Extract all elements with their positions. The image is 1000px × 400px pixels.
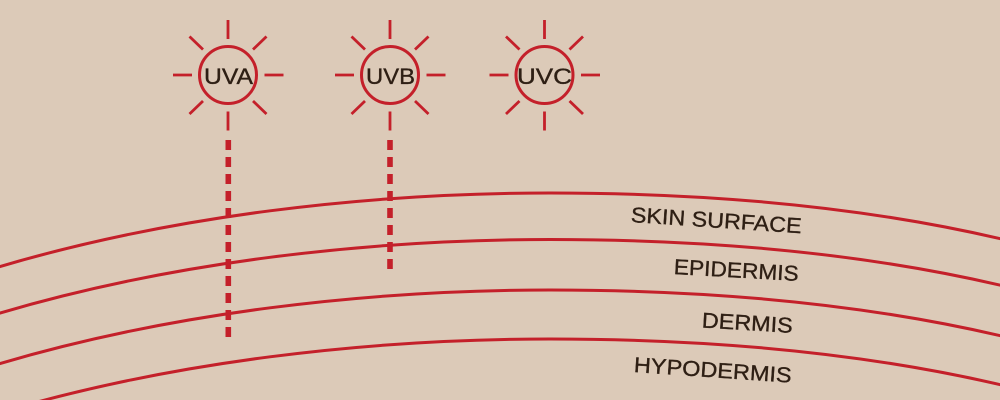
label: UVC: UVC [517, 64, 572, 89]
icon: UVB sun [335, 20, 446, 130]
label: epidermis: EPIDERMIS [673, 255, 799, 286]
arrow: UVA penetration dashed line [226, 140, 231, 338]
label: UVB: UVB [366, 64, 415, 89]
label: dermis: DERMIS [701, 309, 793, 338]
curve: epidermis [0, 240, 1000, 316]
icon: UVA sun [173, 20, 284, 130]
label: UVA: UVA [204, 64, 253, 89]
label: skin surface: SKIN SURFACE [630, 203, 802, 238]
label: hypodermis: HYPODERMIS [633, 353, 792, 388]
curve: dermis [0, 290, 1000, 366]
skin layer curves [0, 193, 1000, 400]
curve: hypodermis [0, 339, 1000, 400]
curve: skin surface [0, 193, 1000, 270]
icon: UVC sun [490, 20, 600, 130]
arrow: UVB penetration dashed line [387, 140, 393, 270]
